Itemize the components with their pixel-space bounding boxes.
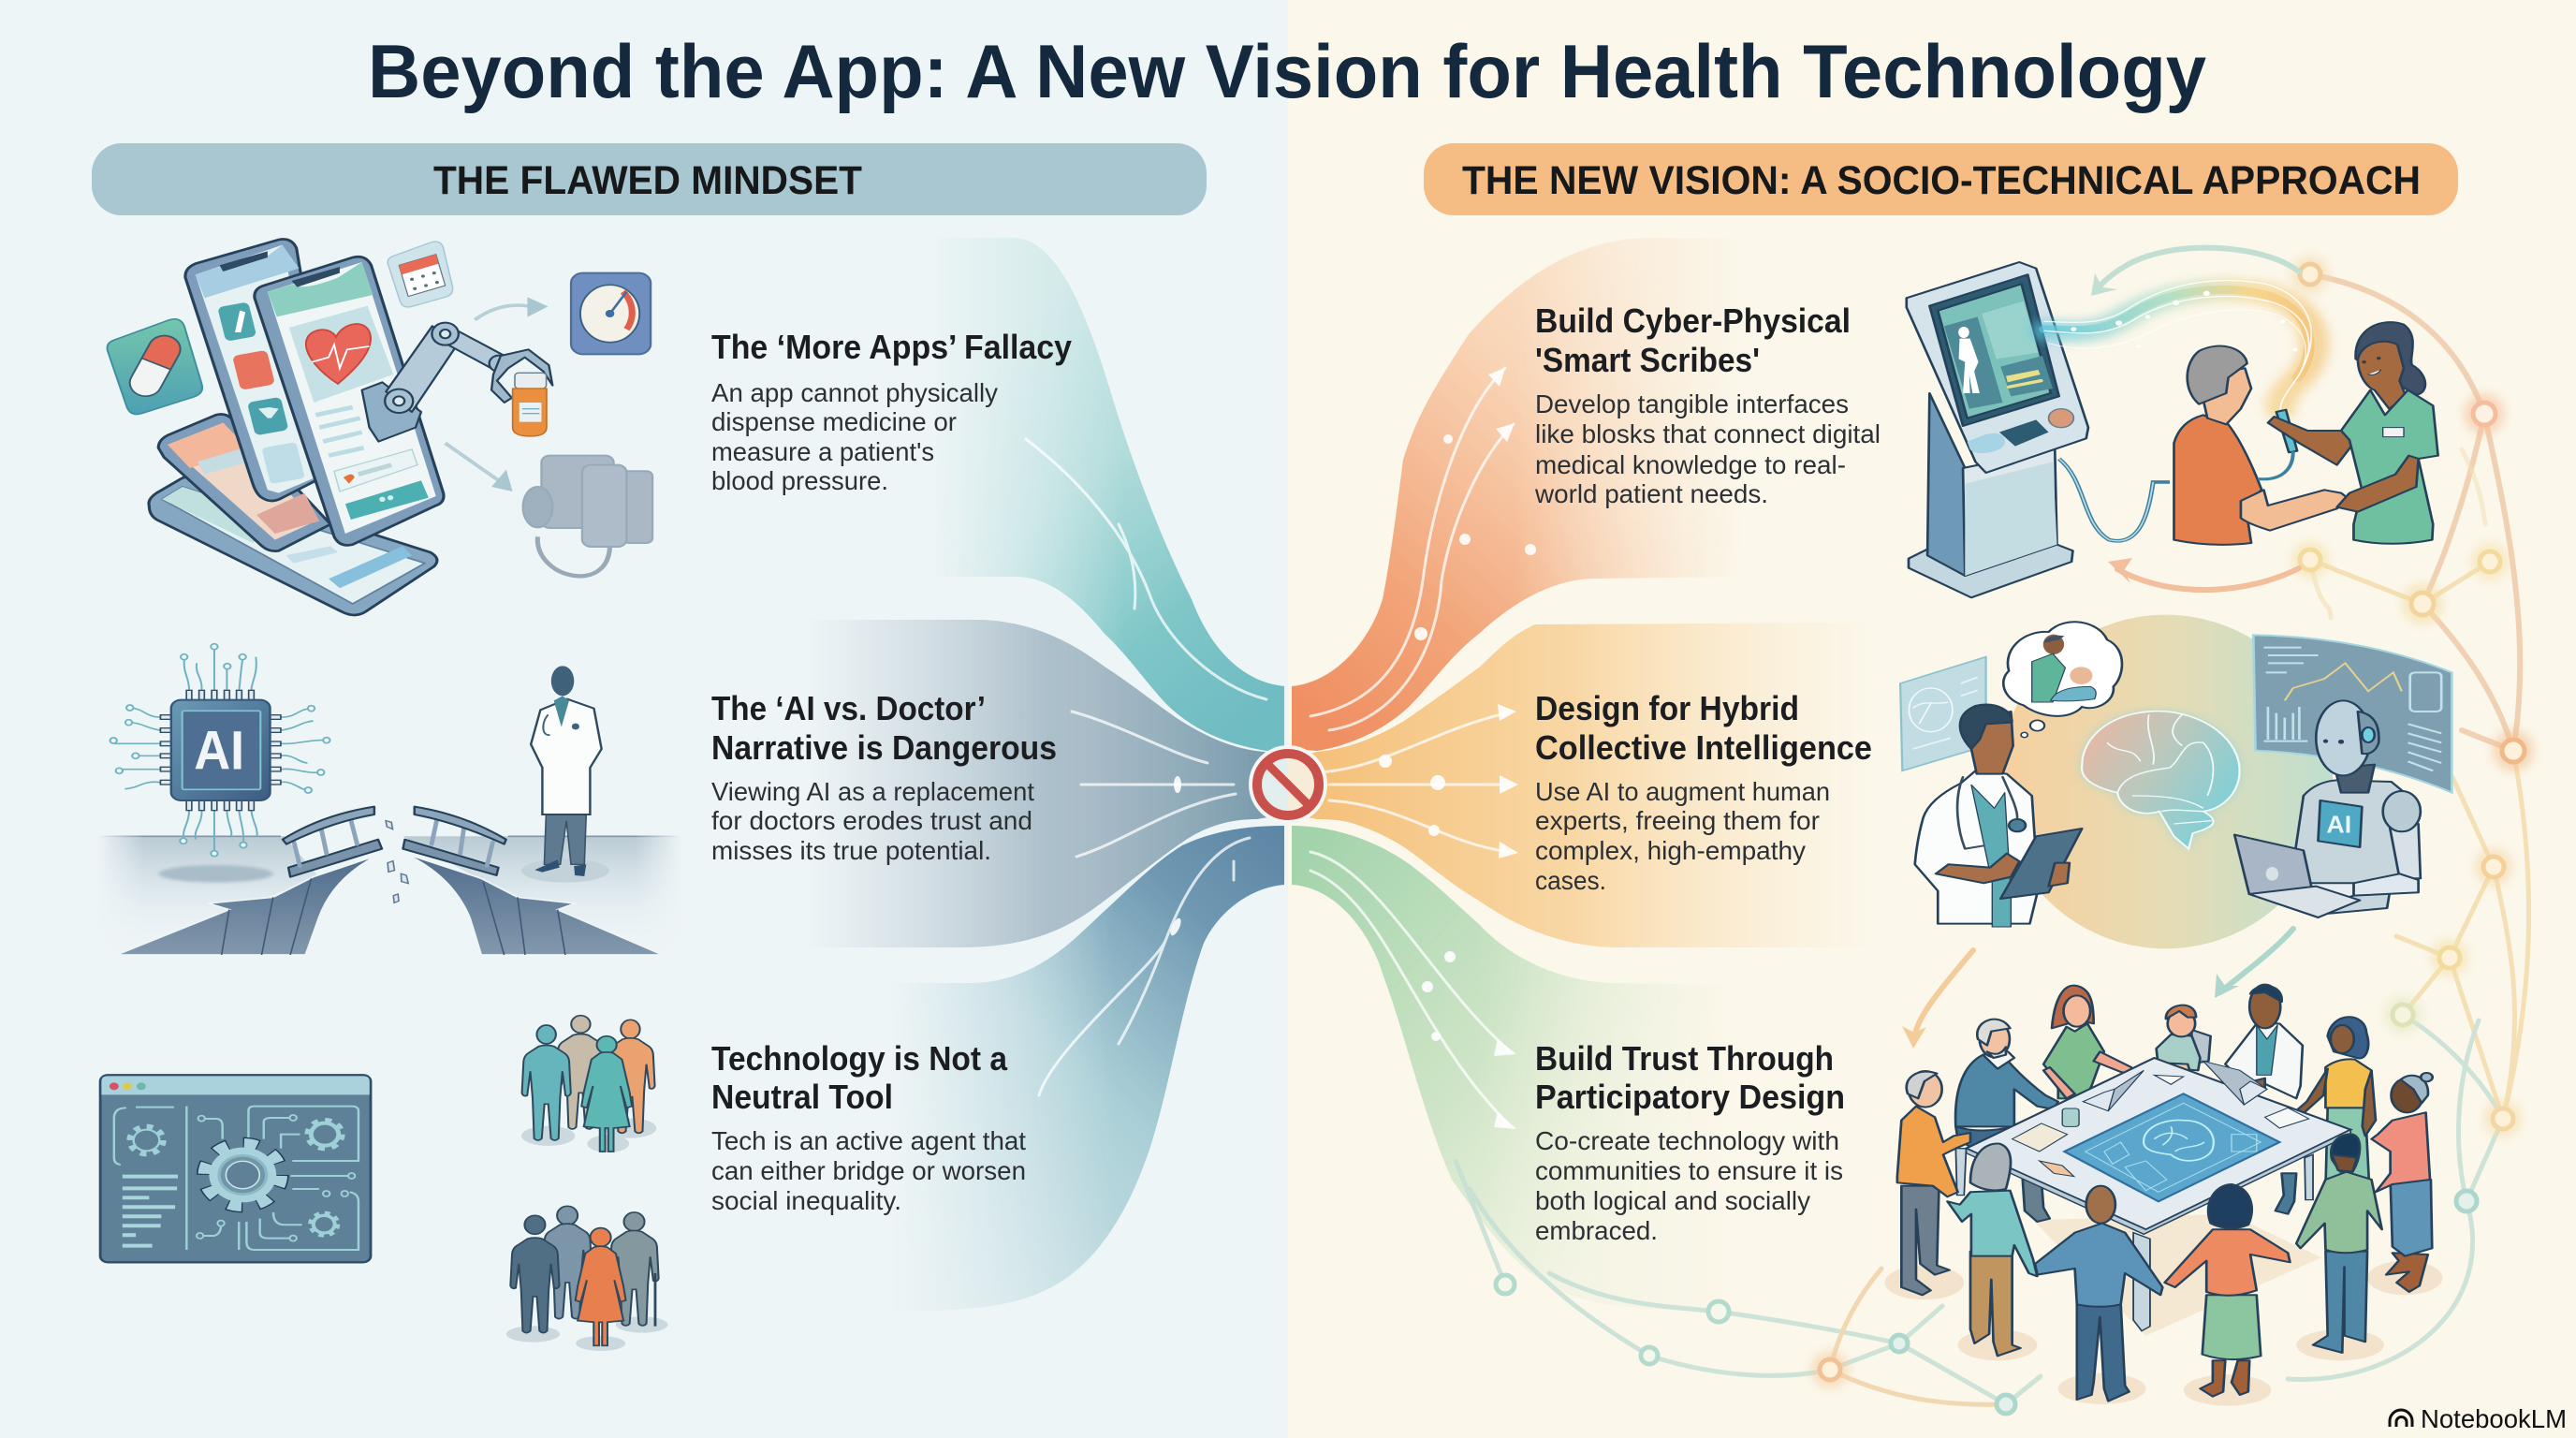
illustration: diverse people groups [506, 1016, 667, 1351]
text: the AI vs doctor narrative: The ‘AI vs. Doctor’ [711, 689, 986, 727]
arrow to gauge [475, 297, 549, 320]
text: design for hybrid collective intelligence: Use AI to augment human [1535, 777, 1830, 806]
left data panel [1900, 657, 1986, 770]
table items [2012, 1061, 2309, 1177]
group one: teal and orange people [521, 1016, 656, 1152]
left cliff [116, 855, 378, 955]
left background panel [0, 0, 1288, 1438]
text: the more apps fallacy [711, 328, 1072, 495]
text: the more apps fallacy: measure a patient's [711, 437, 934, 466]
text: design for hybrid collective intelligence: Collective Intelligence [1535, 728, 1872, 767]
small gears [130, 1122, 341, 1235]
tilted middle phone [158, 414, 330, 551]
arrow to cuff [446, 443, 513, 492]
text: technology is not neutral: can either bridge or worsen [711, 1156, 1026, 1185]
ai chip with circuit traces: AI [194, 720, 244, 781]
text: build trust through participatory design: embraced. [1535, 1216, 1658, 1245]
group two: grey and orange people [506, 1206, 667, 1351]
floor shadows [1884, 1214, 2442, 1406]
text: the AI vs doctor narrative: Viewing AI as a replacement [711, 777, 1034, 806]
text: build trust through participatory design: Participatory Design [1535, 1078, 1845, 1116]
doctor with tablet [1915, 705, 2082, 927]
nurse [2268, 322, 2438, 544]
header: the flawed mindset [92, 143, 1207, 215]
curved arrows [1914, 248, 2299, 1041]
text: design for hybrid collective intelligence: complex, high-empathy [1535, 836, 1806, 865]
header: the new vision: THE NEW VISION: A SOCIO-TECHNICAL APPROACH [1462, 158, 2421, 203]
text: technology is not neutral [711, 1039, 1026, 1215]
AI robot with laptop: AI [2326, 811, 2351, 838]
text: build trust through participatory design: both logical and socially [1535, 1186, 1810, 1215]
right bridge fragment [402, 807, 506, 875]
text: the AI vs doctor narrative: for doctors erodes trust and [711, 806, 1032, 835]
AI robot with laptop [2234, 700, 2421, 917]
network nodes [1496, 256, 2534, 1414]
people in front of the table [1897, 1071, 2433, 1401]
header: the new vision [1424, 143, 2458, 215]
text: build cyber-physical smart scribes: like blosks that connect digital [1535, 419, 1881, 448]
illustration: smart scribe kiosk and care interaction [1907, 262, 2438, 597]
background blob [1998, 615, 2333, 948]
header: the flawed mindset: THE FLAWED MINDSET [433, 158, 862, 203]
text: the AI vs doctor narrative: Narrative is Dangerous [711, 728, 1057, 767]
text: technology is not neutral: Technology is Not a [711, 1039, 1008, 1078]
text: design for hybrid collective intelligence: cases. [1535, 866, 1606, 895]
right curved data panel [2253, 635, 2452, 793]
title: Beyond the App: A New Vision for Health Technology [368, 30, 2206, 114]
robot arm holding bottle [362, 323, 552, 442]
illustration: AI chip, broken bridge and doctor [97, 644, 681, 958]
icon: pill tile [108, 319, 202, 414]
text: design for hybrid collective intelligence [1535, 689, 1872, 895]
node network lines on the right [1456, 248, 2534, 1414]
text: build trust through participatory design: communities to ensure it is [1535, 1156, 1843, 1185]
text: the more apps fallacy: dispense medicine or [711, 407, 957, 436]
icon: calendar tile [388, 242, 453, 307]
doctor [521, 666, 609, 883]
right background panel [1288, 0, 2576, 1438]
text: the more apps fallacy: The ‘More Apps’ Fallacy [711, 328, 1072, 366]
blueprint with brain [2064, 1093, 2279, 1201]
text: build cyber-physical smart scribes: world patient needs. [1534, 479, 1768, 508]
table top [1967, 1058, 2350, 1229]
text: the more apps fallacy: blood pressure. [711, 466, 888, 495]
text: build trust through participatory design: Co-create technology with [1535, 1126, 1839, 1155]
thin white flow lines [1026, 368, 1514, 1124]
illustration: phones, robot arm and medical icons [108, 240, 652, 615]
ground [101, 835, 678, 914]
flow ribbons converging at centre [805, 238, 1872, 1312]
icon: central prohibition sign [1249, 745, 1327, 824]
text: build cyber-physical smart scribes [1534, 301, 1881, 508]
text: technology is not neutral: Neutral Tool [711, 1078, 893, 1116]
glowing data ribbon [2044, 281, 2314, 409]
text: design for hybrid collective intelligence: Design for Hybrid [1535, 689, 1799, 727]
left bridge fragment [283, 807, 382, 877]
text: build cyber-physical smart scribes: medical knowledge to real- [1535, 450, 1846, 479]
device held by nurse [2260, 410, 2297, 479]
text: build cyber-physical smart scribes: 'Smart Scribes' [1535, 341, 1760, 379]
table legs [1955, 1149, 2313, 1331]
thought bubble [2003, 622, 2122, 738]
kiosk [1907, 262, 2088, 597]
illustration: participatory design table [1884, 985, 2442, 1406]
text: build trust through participatory design: Build Trust Through [1535, 1039, 1834, 1078]
upright back phone [185, 240, 334, 501]
icon: gauge tile [571, 273, 651, 354]
text: the AI vs doctor narrative [711, 689, 1057, 865]
icon: blood pressure cuff [523, 456, 652, 576]
NotebookLM watermark: NotebookLM [2421, 1404, 2567, 1433]
text: build cyber-physical smart scribes: Develop tangible interfaces [1535, 389, 1849, 418]
text: the AI vs doctor narrative: misses its true potential. [711, 836, 991, 865]
text: build trust through participatory design [1535, 1039, 1845, 1245]
people behind the table [1955, 985, 2376, 1222]
glowing brain [2082, 712, 2240, 849]
text: the more apps fallacy: An app cannot physically [711, 378, 998, 407]
text: build cyber-physical smart scribes: Build Cyber-Physical [1535, 301, 1851, 340]
patient [2174, 346, 2349, 545]
illustration: software window with gears [100, 1075, 371, 1262]
main gear [207, 1145, 279, 1205]
front phone [255, 257, 444, 545]
text: design for hybrid collective intelligence: experts, freeing them for [1535, 806, 1820, 835]
flat bottom phone [149, 477, 437, 615]
illustration: hybrid collective intelligence [1900, 615, 2452, 948]
right cliff [405, 854, 663, 955]
ai chip with circuit traces [110, 644, 330, 857]
rubble [386, 821, 408, 902]
connection cable [2059, 459, 2170, 541]
text: technology is not neutral: social inequality. [711, 1186, 901, 1215]
text: technology is not neutral: Tech is an active agent that [711, 1126, 1026, 1155]
